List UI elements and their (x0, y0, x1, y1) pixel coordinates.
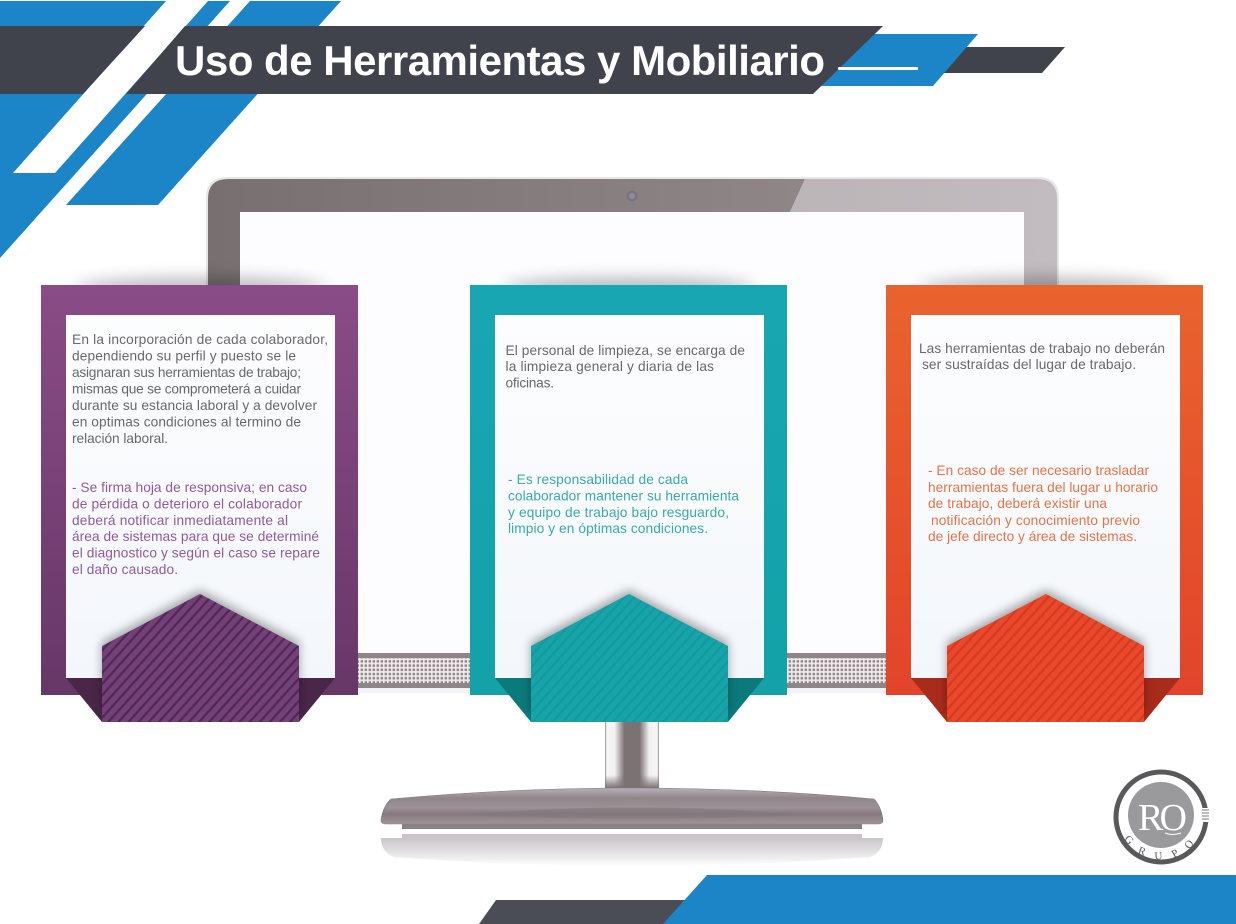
house tab (947, 594, 1144, 722)
intro text (919, 341, 1165, 372)
detail text (928, 463, 1158, 544)
detail text: área de sistemas para que se determiné (72, 529, 319, 544)
header ribbon accents on the right (805, 34, 1065, 86)
intro text: mismas que se comprometerá a cuidar (72, 382, 301, 396)
intro text (506, 343, 745, 390)
logo: Grupo RO (1114, 770, 1209, 864)
intro text: ser sustraídas del lugar de trabajo. (922, 357, 1136, 372)
detail text: notificación y conocimiento previo (931, 513, 1140, 528)
intro text: El personal de limpieza, se encarga de (506, 343, 745, 358)
panel: purple (41, 278, 358, 722)
text card (495, 315, 764, 678)
detail text: colaborador mantener su herramienta (508, 488, 739, 504)
detail text: el diagnostico y según el caso se repare (72, 546, 320, 561)
monitor stand base (381, 788, 883, 829)
house tab (102, 594, 299, 722)
detail text: limpio y en óptimas condiciones. (508, 521, 708, 536)
intro text: la limpieza general y diaria de las (506, 359, 714, 374)
footer decoration (479, 875, 1236, 924)
ribbon folds (911, 678, 1180, 722)
webcam (626, 190, 638, 202)
logo: Grupo RO: RO (1138, 797, 1187, 839)
panel frame (886, 285, 1203, 695)
detail text: y equipo de trabajo bajo resguardo, (508, 505, 729, 520)
intro text: durante su estancia laboral y a devolver (72, 398, 317, 413)
speaker bar (240, 653, 1024, 693)
house tab (531, 594, 728, 722)
monitor stand neck (605, 715, 659, 788)
title: Uso de Herramientas y Mobiliario (175, 37, 825, 84)
detail text: deberá notificar inmediatamente al (72, 513, 288, 528)
monitor frame (206, 177, 1059, 300)
detail text: - Es responsabilidad de cada (508, 472, 688, 487)
detail text (508, 472, 739, 536)
detail text: de jefe directo y área de sistemas. (928, 529, 1137, 544)
detail text: el daño causado. (72, 562, 178, 577)
monitor base reflection (381, 834, 883, 866)
panel frame (470, 285, 787, 695)
intro text: dependiendo su perfil y puesto se le (72, 348, 296, 364)
ribbon folds (66, 678, 335, 722)
intro text (72, 332, 328, 446)
intro text: asignaran sus herramientas de trabajo; (72, 365, 301, 380)
detail text (72, 480, 320, 577)
intro text: en optimas condiciones al termino de (72, 414, 301, 430)
title banner (0, 26, 883, 94)
intro text: relación laboral. (72, 431, 168, 446)
ribbon white line (838, 67, 918, 70)
text card (911, 315, 1180, 678)
detail text: - En caso de ser necesario trasladar (928, 463, 1149, 478)
detail text: de trabajo, deberá existir una (928, 496, 1107, 511)
detail text: herramientas fuera del lugar u horario (928, 480, 1158, 495)
ribbon folds (495, 678, 764, 722)
panel: orange (886, 278, 1203, 722)
intro text: En la incorporación de cada colaborador, (72, 332, 328, 347)
header decoration: blue diagonal bands (0, 1, 341, 258)
text card (66, 315, 335, 678)
logo: Grupo RO: GRUPO (1125, 836, 1193, 860)
screen (240, 212, 1024, 654)
monitor (206, 177, 1059, 693)
detail text: de pérdida o deterioro el colaborador (72, 496, 302, 511)
intro text: oficinas. (506, 376, 554, 390)
panel: teal (470, 278, 787, 722)
intro text: Las herramientas de trabajo no deberán (919, 341, 1165, 356)
detail text: - Se firma hoja de responsiva; en caso (72, 480, 307, 495)
panel frame (41, 285, 358, 695)
